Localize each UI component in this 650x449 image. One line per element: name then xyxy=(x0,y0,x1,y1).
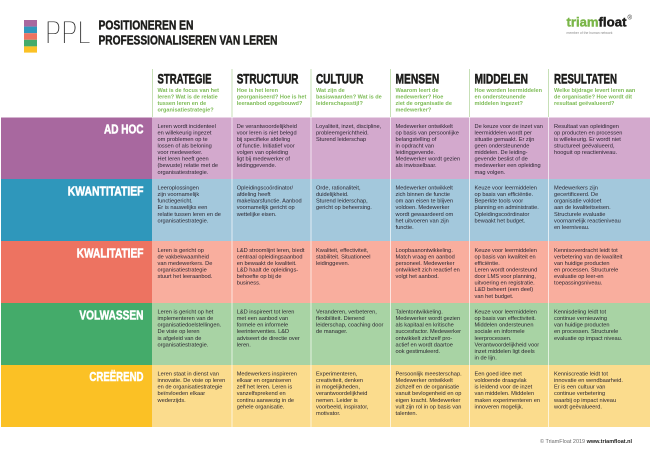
cell: kwantitatief structuur: voornamelijk gericht op xyxy=(237,205,295,211)
cell: creërend strategie: beïnvloeden elkaar xyxy=(158,391,205,397)
column heading: Strategie: tussen leren en de xyxy=(158,101,206,107)
column heading: Mensen: medewerker? Hoe xyxy=(396,94,443,100)
column heading: Structuur: STRUCTUUR xyxy=(237,70,298,86)
cell: kwalitatief mensen: volgt het aanbod. xyxy=(396,274,439,280)
cell: creërend cultuur: verantwoordelijkheid xyxy=(316,391,367,397)
cell: ad hoc middelen: middelen. De leiding- xyxy=(474,150,528,156)
cell: ad hoc mensen: leidinggevende. xyxy=(396,150,435,156)
cell: creërend middelen: van middelen. Middelen xyxy=(474,391,534,397)
cell: volwassen structuur: formele en informele xyxy=(237,323,288,329)
cell: volwassen resultaten: en processen. Structurele xyxy=(554,329,618,335)
cell: kwalitatief middelen: Keuze voor leermiddelen xyxy=(474,248,537,254)
cell: kwalitatief mensen: ontwikkelt zich reactief en xyxy=(396,268,460,274)
cell: volwassen middelen: in de lijn. xyxy=(474,355,497,361)
cell: kwalitatief strategie: stuurt het leeraanbod. xyxy=(158,274,213,280)
column heading: Middelen xyxy=(474,70,543,107)
cell: volwassen middelen: op basis van effectiviteit. xyxy=(474,316,536,322)
cell: kwantitatief strategie: zijn voornamelijk xyxy=(158,192,199,198)
triamfloat logo: ® xyxy=(628,14,632,22)
row label: Creërend: CREËREND xyxy=(89,369,144,384)
cell: kwantitatief mensen: Medewerker ontwikkelt xyxy=(396,186,453,192)
cell: kwalitatief mensen: personeel. Medewerker xyxy=(396,261,455,267)
cell: creërend resultaten: continue verbetering xyxy=(554,391,605,397)
cell: volwassen strategie: Leren is gericht op het xyxy=(158,310,214,316)
cell: kwantitatief resultaten: gecertificeerd. De xyxy=(554,192,598,198)
cell: kwalitatief middelen: op basis van kwaliteit en xyxy=(474,254,536,260)
cell: kwantitatief strategie: relatie tussen leren en de xyxy=(158,212,221,218)
cell: creërend mensen: zichzelf en de organisatie xyxy=(396,385,459,391)
cell: kwantitatief mensen: het uitvoeren van zijn xyxy=(396,218,449,224)
cell: volwassen structuur: L&D inspireert tot leren xyxy=(237,310,294,316)
cell: creërend structuur: Medewerkers inspireren xyxy=(237,372,297,378)
cell: kwantitatief middelen: planning en administratie. xyxy=(474,205,539,211)
cell: ad hoc middelen: medewerker een opleiding xyxy=(474,163,541,169)
cell: creërend cultuur: voorbeeld, inspirator, xyxy=(316,404,369,410)
cell: ad hoc resultaten: op producten en processen xyxy=(554,130,622,136)
row label: Ad hoc: AD HOC xyxy=(104,122,144,136)
cell: volwassen strategie: is afgeleid van de xyxy=(158,336,201,342)
cell: ad hoc cultuur: Sturend leiderschap xyxy=(316,137,366,143)
cell: kwantitatief middelen: Beperkte tools voor xyxy=(474,199,523,205)
cell: creërend middelen: innoveren mogelijk. xyxy=(474,404,524,410)
cell: kwalitatief structuur: L&D stroomlijnt leren, biedt xyxy=(237,248,305,254)
cell: creërend strategie: wederzijds. xyxy=(156,398,186,404)
cell: kwalitatief structuur: centraal opleidingsaanbod xyxy=(237,254,303,260)
column heading: Cultuur: leiderschapsstijl? xyxy=(316,101,363,107)
cell: ad hoc resultaten: is willekeurig. Er wordt niet xyxy=(554,137,621,143)
cell: ad hoc structuur: volgen van opleiding xyxy=(237,150,288,156)
cell: kwalitatief resultaten: evaluatie op leer-en xyxy=(554,274,604,280)
cell: creërend structuur: elkaar en organiseren xyxy=(237,378,291,384)
cell: creërend structuur: vanzelfsprekend en xyxy=(237,391,286,397)
column heading: Middelen: en ondersteunende xyxy=(474,94,526,100)
column heading: Resultaten: RESULTATEN xyxy=(554,70,617,86)
cell: ad hoc strategie: (bewuste) relatie met de xyxy=(158,163,218,169)
cell: kwantitatief cultuur: Sturend leiderschap, xyxy=(316,199,368,205)
cell: volwassen mensen: actief en wordt daartoe xyxy=(396,342,453,348)
cell: creërend mensen: vanuit bevlogenheid en op xyxy=(396,391,461,397)
cell: volwassen resultaten: van huidige producten xyxy=(554,323,610,329)
cell: kwalitatief structuur: behoefte op bij de xyxy=(237,274,282,280)
column heading: Mensen: MENSEN xyxy=(396,70,439,86)
cell: volwassen middelen: sociale en informele xyxy=(474,329,525,335)
cell: creërend resultaten: innovatie en wendbaarheid. xyxy=(554,378,623,384)
cell: kwantitatief cultuur: duidelijkheid. xyxy=(316,192,349,198)
cell: volwassen cultuur: Veranderen, verbeteren, xyxy=(316,310,377,316)
column heading: Structuur xyxy=(237,70,307,107)
cell: ad hoc strategie: lossen of als beloning xyxy=(158,144,212,150)
column heading: Cultuur xyxy=(316,70,382,107)
cell: kwalitatief resultaten: en processen. Structurele xyxy=(554,268,618,274)
cell: ad hoc middelen: situatie gemaakt. Er zijn xyxy=(474,137,534,143)
column heading: Cultuur: CULTUUR xyxy=(316,70,363,86)
cell: kwantitatief strategie: Leeroplossingen xyxy=(158,186,199,192)
cell: volwassen strategie: De visie op leren xyxy=(158,329,200,335)
cell: creërend middelen: voldoende draagvlak xyxy=(474,378,527,384)
column heading: Mensen: ziet de organisatie de xyxy=(396,101,452,107)
row label: Kwalitatief: KWALITATIEF xyxy=(77,246,144,260)
cell: kwantitatief resultaten: Medewerkers zijn xyxy=(554,186,598,192)
cell: volwassen resultaten: evaluatie op impact niveau. xyxy=(554,336,623,342)
cell: volwassen mensen: als kapitaal en kritische xyxy=(396,323,454,329)
cell: ad hoc cultuur: probleemgerichtheid. xyxy=(316,130,369,136)
cell: creërend structuur: gehele organisatie. xyxy=(237,404,285,410)
cell: kwantitatief mensen: functie. xyxy=(396,225,414,231)
title xyxy=(98,18,278,48)
cell: ad hoc middelen: gevende beslist of de xyxy=(474,157,528,163)
cell: kwalitatief structuur: en bewaakt de kwaliteit. xyxy=(237,261,297,267)
cell: kwantitatief cultuur: gericht op beheersing. xyxy=(316,205,372,211)
triamfloat logo: member of the human network xyxy=(566,31,613,35)
cell: kwantitatief resultaten: organisatie voldoet xyxy=(554,199,602,205)
cell: kwantitatief middelen: bewaakt het budget. xyxy=(474,218,526,224)
cell: creërend cultuur: Experimenteren, xyxy=(316,372,358,378)
cell: kwalitatief middelen: uitvoering en registratie. xyxy=(474,281,535,287)
footer copyright: © TriamFloat 2019 www.triamfloat.nl xyxy=(540,438,632,445)
cell: ad hoc structuur: ligt bij medewerker of xyxy=(237,157,290,163)
cell: creërend cultuur: motivator. xyxy=(316,411,341,417)
cell: volwassen cultuur: leiderschap, coaching door xyxy=(316,323,384,329)
column heading: Middelen: Hoe worden leermiddelen xyxy=(474,88,543,94)
cell: kwalitatief cultuur: leidinggeven. xyxy=(316,261,350,267)
cell: ad hoc middelen: geen ondersteunende xyxy=(474,144,529,150)
cell: volwassen middelen: leerprocessen. xyxy=(474,336,512,342)
cell: kwantitatief resultaten: en leerniveau. xyxy=(554,225,590,231)
cell: kwalitatief strategie: organisatiestrategie xyxy=(158,268,207,274)
cell: creërend cultuur: creativiteit, denken xyxy=(316,378,363,384)
column heading: Mensen: medewerker? xyxy=(396,108,432,114)
cell: kwalitatief middelen: door LMS voor planning, xyxy=(474,274,536,280)
logo color bar xyxy=(24,20,37,53)
cell: creërend mensen: eigen kracht. Medewerker xyxy=(396,398,461,404)
cell: ad hoc structuur: voor leren is niet belegd xyxy=(237,130,297,136)
row label backgrounds xyxy=(1,118,152,427)
cell: creërend resultaten: wordt geëvalueerd. xyxy=(553,404,602,410)
cell: ad hoc middelen: leermiddelen wordt per xyxy=(474,130,532,136)
cell: creërend middelen: is leidend voor de inzet xyxy=(474,385,533,391)
column heading: Strategie: Wat is de focus van het xyxy=(158,88,219,94)
cell: volwassen mensen: Talentontwikkeling. xyxy=(396,310,443,316)
column heading: Structuur: leeraanbod opgebouwd? xyxy=(237,101,303,107)
row label: Volwassen: VOLWASSEN xyxy=(79,308,144,322)
cell: volwassen strategie: implementeren van de xyxy=(158,316,213,322)
cell: volwassen resultaten: Kennisdeling leidt tot xyxy=(554,310,606,316)
column heading: Resultaten: resultaat geëvalueerd? xyxy=(554,101,615,107)
cell: volwassen middelen: inzet middelen ligt deels xyxy=(474,349,535,355)
cell: kwantitatief mensen: voldoen. Medewerker xyxy=(396,205,450,211)
cell: volwassen middelen: Middelen ondersteunen xyxy=(474,323,533,329)
cell: kwalitatief middelen: van het budget. xyxy=(474,294,514,300)
column heading: Resultaten xyxy=(554,70,636,107)
column heading: Mensen xyxy=(396,70,452,114)
cell: kwantitatief mensen: zich binnen de functie xyxy=(396,192,450,198)
cell: kwalitatief structuur: business. xyxy=(237,281,261,287)
cell: ad hoc middelen: De keuze voor de inzet van xyxy=(474,124,543,130)
cell: volwassen cultuur: flexibiliteit. Dienend xyxy=(316,316,365,322)
cell: ad hoc mensen: belangstelling of xyxy=(396,137,437,143)
cell: kwantitatief strategie: functiegericht. xyxy=(158,199,193,205)
cell: kwantitatief strategie: Er is nauwelijks een xyxy=(158,205,207,211)
cell: volwassen middelen: Keuze voor leermiddelen xyxy=(474,310,537,316)
cell: ad hoc strategie: om problemen op te xyxy=(158,137,208,143)
cell: ad hoc strategie: voor medewerker. xyxy=(158,150,203,156)
cell: kwantitatief structuur: wettelijke eisen. xyxy=(236,212,277,218)
column heading: Resultaten: Welke bijdrage levert leren aan xyxy=(554,88,636,94)
cell: volwassen mensen: succesfactor. Medewerker xyxy=(396,329,461,335)
cell: creërend mensen: vult zijn rol in op basis van xyxy=(396,404,461,410)
cell: kwalitatief resultaten: verbetering van de kwaliteit xyxy=(554,254,623,260)
cell: ad hoc mensen: Medewerker ontwikkelt xyxy=(396,124,453,130)
cell: kwalitatief mensen: Loopbaanontwikkeling. xyxy=(396,248,453,254)
cell: kwalitatief strategie: de vakbekwaamheid xyxy=(158,254,209,260)
cell: kwantitatief middelen: Opleidingscoördinator xyxy=(474,212,529,218)
cell: volwassen cultuur: de manager. xyxy=(316,329,348,335)
cell: volwassen strategie: organisatiedoelstellingen. xyxy=(158,323,222,329)
title: PROFESSIONALISEREN VAN LEREN xyxy=(98,32,278,48)
cell: kwalitatief strategie: Leren is gericht op xyxy=(158,248,204,254)
cell: kwantitatief middelen: op basis van efficiëntie. xyxy=(474,192,533,198)
cell: kwalitatief middelen: Leren wordt ondersteund xyxy=(474,268,537,274)
column heading: Mensen: Waarom leert de xyxy=(396,88,438,94)
column heading: Middelen: MIDDELEN xyxy=(474,70,528,86)
cell: ad hoc structuur: bij specifieke afdeling xyxy=(237,137,290,143)
column heading: Strategie: organisatiestrategie? xyxy=(158,108,214,114)
cell: kwalitatief mensen: Match vraag en aanbod xyxy=(396,254,455,260)
cell: kwantitatief structuur: Opleidingscoördinator/ xyxy=(237,186,294,192)
cell: creërend strategie: en de organisatiestrategie xyxy=(158,385,222,391)
cell: kwalitatief resultaten: toepassingsniveau. xyxy=(554,281,603,287)
cell: ad hoc middelen: mag volgen. xyxy=(474,170,506,176)
column heading: Structuur: georganiseerd? Hoe is het xyxy=(237,94,307,100)
cell: creërend strategie: Leren staat in dienst van xyxy=(158,372,219,378)
cell: kwalitatief strategie: van medewerkers. De xyxy=(158,261,212,267)
cell: ad hoc mensen: als inwisselbaar. xyxy=(396,163,437,169)
cell: creërend mensen: talenten. xyxy=(396,411,418,417)
title: POSITIONEREN EN xyxy=(98,18,194,32)
cell: ad hoc strategie: Leren wordt incidenteel xyxy=(158,124,216,130)
cell: creërend resultaten: Kenniscreatie leidt tot xyxy=(554,372,608,378)
cell: kwantitatief structuur: makelaarsfunctie. Aanbod xyxy=(237,199,302,205)
cell: kwalitatief middelen: efficiëntie. xyxy=(474,261,500,267)
cell: kwalitatief resultaten: van huidige producten xyxy=(554,261,610,267)
cell: creërend resultaten: Er is een cultuur van xyxy=(554,385,605,391)
cell: creërend cultuur: in mogelijkheden, xyxy=(316,385,360,391)
cell: ad hoc mensen: in opdracht van xyxy=(396,144,434,150)
cell: ad hoc mensen: op basis van persoonlijke xyxy=(396,130,459,136)
cell: volwassen structuur: met een aanbod van xyxy=(237,316,288,322)
cell: ad hoc mensen: Medewerker wordt gezien xyxy=(396,157,460,163)
cell: kwalitatief cultuur: Kwaliteit, effectiviteit, xyxy=(316,248,369,254)
cell: kwantitatief middelen: Keuze voor leermiddelen xyxy=(474,186,537,192)
triamfloat logo xyxy=(566,14,632,35)
cell: volwassen structuur: leren. xyxy=(237,342,251,348)
cell: creërend strategie: innovatie. De visie op leren xyxy=(158,378,225,384)
cell: ad hoc strategie: organisatiestrategie. xyxy=(158,170,209,176)
cell: ad hoc resultaten: Resultaat van opleidingen xyxy=(554,124,619,130)
column heading: Cultuur: Wat zijn de xyxy=(316,88,345,94)
cell: creërend cultuur: nemen. Leider is xyxy=(316,398,358,404)
row cell backgrounds xyxy=(152,118,650,427)
cell: ad hoc cultuur: Loyaliteit, inzet, discipline, xyxy=(316,124,382,130)
cell: volwassen middelen: Verantwoordelijkheid voor xyxy=(474,342,539,348)
cell: creërend mensen: Medewerker ontwikkelt xyxy=(396,378,453,384)
PPL wordmark: PPL xyxy=(45,14,91,52)
cell: kwantitatief strategie: organisatiestrategie. xyxy=(158,218,209,224)
column heading: Strategie xyxy=(158,70,219,114)
cell: kwantitatief structuur: afdeling heeft xyxy=(237,192,271,198)
cell: volwassen mensen: ontwikkelt zichzelf pro- xyxy=(396,336,452,342)
cell: ad hoc resultaten: structureel geëvalueerd, xyxy=(554,144,615,150)
cell: kwantitatief resultaten: Structurele evaluatie xyxy=(554,212,605,218)
cell: ad hoc structuur: De verantwoordelijkheid xyxy=(237,124,297,130)
cell: creërend structuur: continu aanwezig in de xyxy=(237,398,294,404)
cell: kwantitatief resultaten: aan de kwaliteitseisen. xyxy=(554,205,611,211)
cell: volwassen mensen: ook gestimuleerd. xyxy=(396,349,440,355)
cell: kwantitatief mensen: om aan eisen te blijven xyxy=(396,199,453,205)
cell: creërend structuur: zelf het leren. Leren is xyxy=(237,385,292,391)
cell: volwassen resultaten: continue vernieuwing xyxy=(554,316,607,322)
triamfloat logo: triam xyxy=(566,14,598,30)
cell: volwassen mensen: Medewerker wordt gezien xyxy=(396,316,460,322)
cell: creërend mensen: Persoonlijk meesterschap. xyxy=(396,372,462,378)
cell: kwalitatief middelen: L&D beheert (een deel) xyxy=(474,287,533,293)
column heading: Resultaten: de organisatie? Hoe wordt dit xyxy=(554,94,632,100)
cell: ad hoc strategie: Het leren heeft geen xyxy=(158,157,209,163)
cell: kwalitatief resultaten: Kennisoverdracht leidt tot xyxy=(554,248,618,254)
column heading: Middelen: middelen ingezet? xyxy=(474,101,523,107)
column heading: Structuur: Hoe is het leren xyxy=(237,88,279,94)
cell: volwassen structuur: adviseert de directie over xyxy=(237,336,300,342)
cell: kwantitatief cultuur: Orde, rationaliteit, xyxy=(316,186,361,192)
cell: creërend middelen: maken experimenteren en xyxy=(474,398,540,404)
column heading: Strategie: leren? Wat is de relatie xyxy=(158,94,218,100)
cell: ad hoc structuur: leidinggevende. xyxy=(237,163,277,169)
cell: creërend middelen: Een goed idee met xyxy=(474,372,522,378)
column heading: Strategie: STRATEGIE xyxy=(158,70,212,86)
triamfloat logo: float xyxy=(598,14,627,30)
row label: Kwantitatief: KWANTITATIEF xyxy=(68,184,144,198)
cell: kwantitatief mensen: wordt gewaardeerd om xyxy=(394,212,453,218)
cell: volwassen structuur: leerinterventies. L&D xyxy=(237,329,289,335)
cell: kwalitatief cultuur: stabiliteit. Situationeel xyxy=(316,254,371,260)
cell: volwassen strategie: organisatiestrategie. xyxy=(158,342,209,348)
cell: creërend resultaten: waarbij op impact niveau xyxy=(553,398,616,404)
column heading: Cultuur: basiswaarden? Wat is de xyxy=(316,94,382,100)
cell: kwalitatief structuur: L&D haalt de opleidings- xyxy=(237,268,298,274)
cell: ad hoc strategie: en willekeurig ingezet xyxy=(158,130,212,136)
cell: ad hoc structuur: of functie. Initiatief voor xyxy=(237,144,295,150)
cell: kwantitatief resultaten: voornamelijk reactieniveau xyxy=(554,218,621,224)
cell: ad hoc resultaten: hooguit op reactieniveau. xyxy=(554,150,617,156)
